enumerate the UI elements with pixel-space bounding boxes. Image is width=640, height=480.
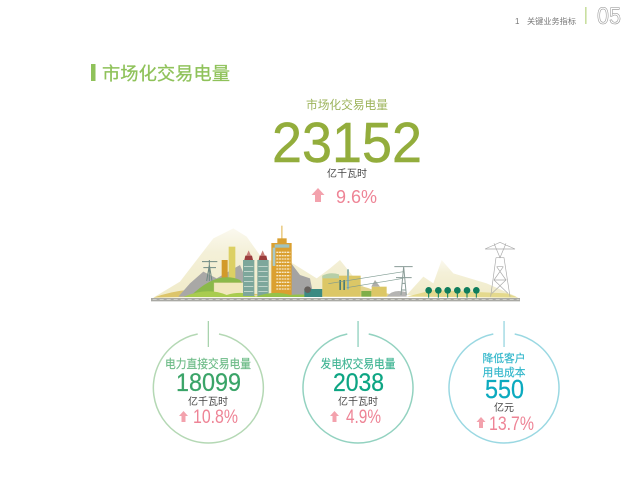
page header: 1 <box>515 17 520 26</box>
metric circle: generation rights <box>303 321 413 443</box>
page header: 关键业务指标 <box>527 16 576 26</box>
page header: 05 <box>597 3 621 30</box>
metric circle: direct trading: 亿千瓦时 <box>188 395 228 408</box>
page header <box>515 3 621 30</box>
metric circle: generation rights: 发电权交易电量 <box>320 356 396 371</box>
metric circle: generation rights: 亿千瓦时 <box>338 395 378 408</box>
transmission tower left <box>202 260 217 281</box>
transmission tower center <box>394 267 413 295</box>
metric circle: direct trading: 18099 <box>176 369 241 397</box>
main metric: 市场化交易电量 <box>306 98 388 112</box>
icon: up arrow <box>476 417 486 428</box>
metric circle: direct trading: 电力直接交易电量 <box>165 356 251 371</box>
metric circle: cost savings <box>449 321 559 443</box>
metric circle: cost savings: 13.7% <box>489 414 534 435</box>
buildings <box>222 260 228 278</box>
illustration: city and power landscape <box>151 226 520 301</box>
transmission tower right <box>485 242 515 297</box>
metric circle: direct trading: 10.8% <box>193 407 238 428</box>
icon: up arrow <box>330 411 339 422</box>
section heading: 市场化交易电量 <box>102 64 230 84</box>
metric circle: generation rights: 2038 <box>333 369 384 397</box>
metric circle: cost savings: 亿元 <box>494 401 514 414</box>
main metric <box>272 98 422 207</box>
metric circle: cost savings: 550 <box>485 374 524 404</box>
metric circle: direct trading <box>153 321 263 443</box>
icon: up arrow <box>312 188 324 202</box>
main metric: 亿千瓦时 <box>327 167 367 180</box>
road <box>151 298 520 301</box>
main metric: 9.6% <box>336 187 377 207</box>
power plant <box>322 276 361 297</box>
main metric: 23152 <box>272 111 422 175</box>
metric circle: generation rights: 4.9% <box>346 407 381 428</box>
metric circle: cost savings: 降低客户 <box>482 351 526 365</box>
icon: up arrow <box>179 411 188 422</box>
metric circle: cost savings: 用电成本 <box>482 365 526 379</box>
row of trees <box>425 287 480 298</box>
